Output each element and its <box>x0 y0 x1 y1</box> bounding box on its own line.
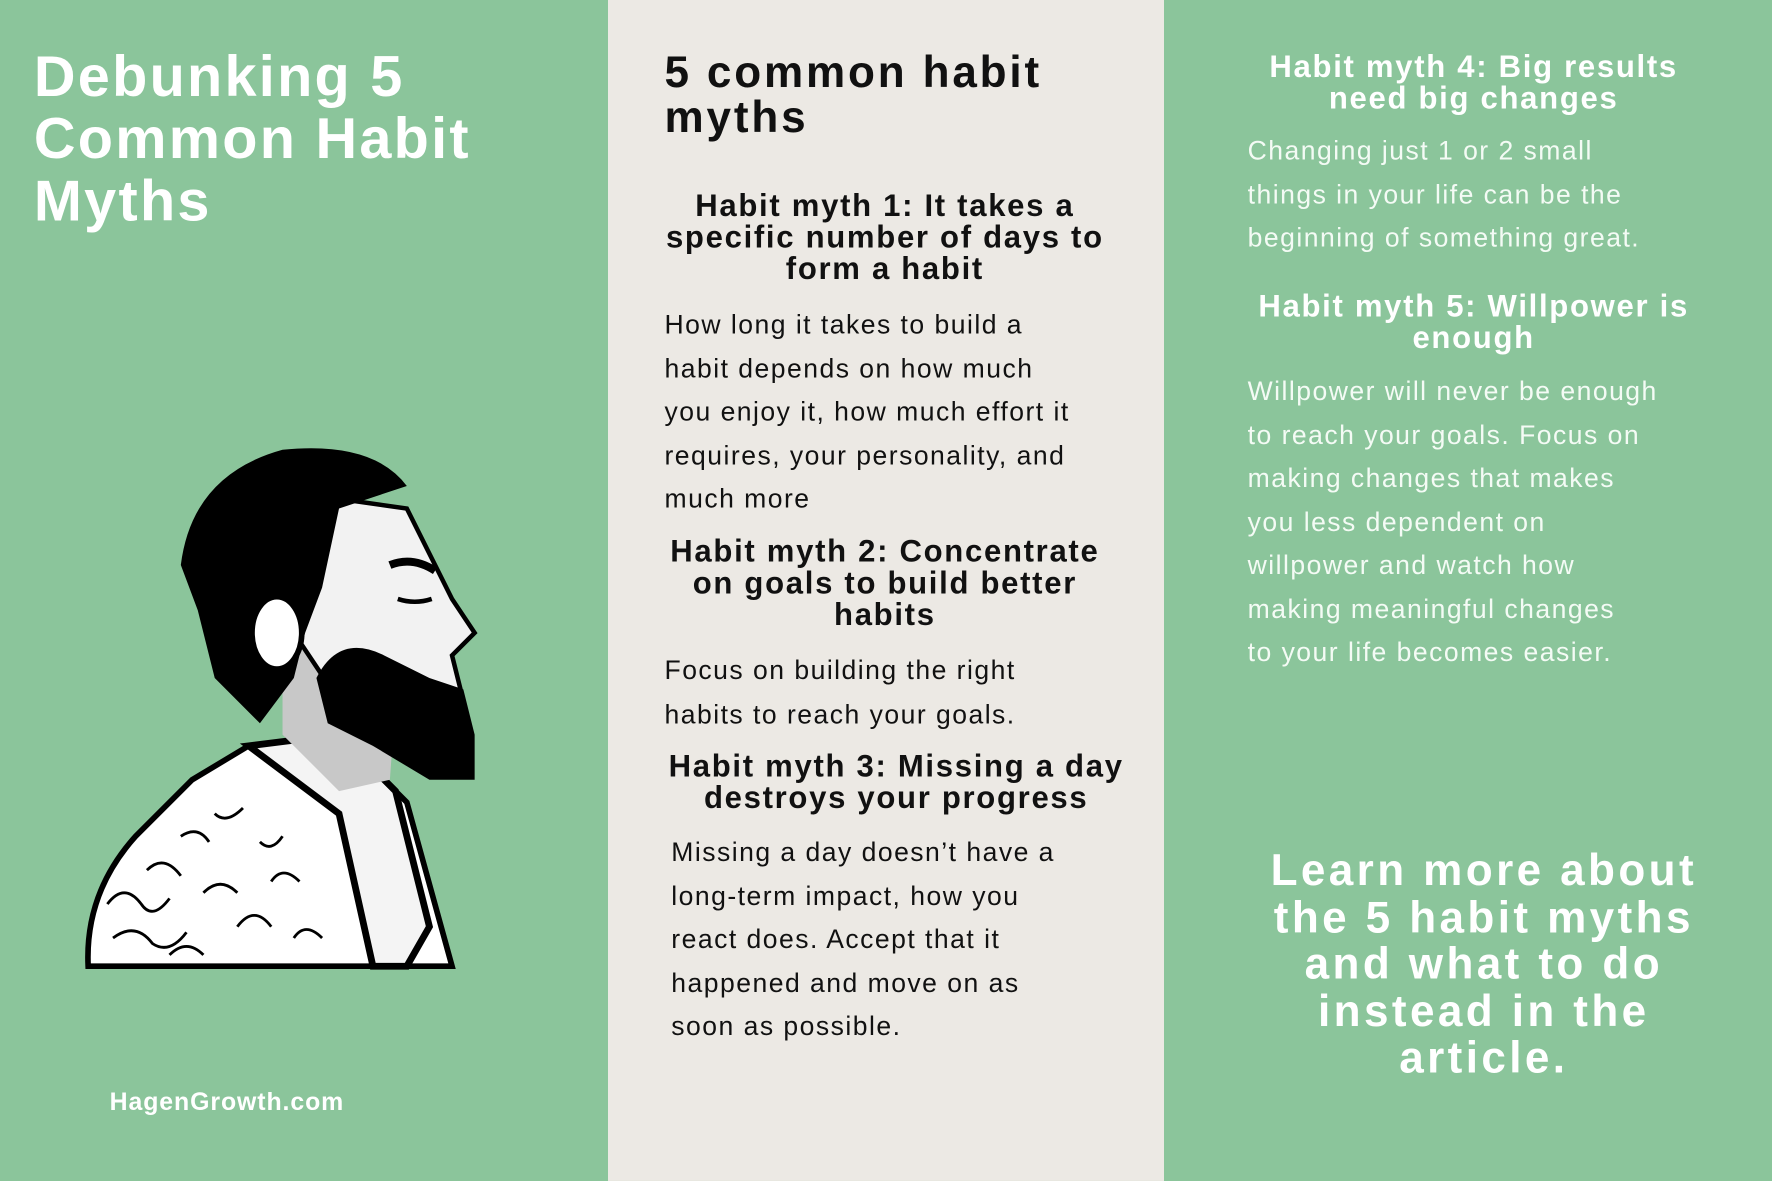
footer: website: HagenGrowth.com <box>110 1087 344 1115</box>
myth 1 heading: Habit myth 1: It takes a <box>695 188 1074 223</box>
title <box>34 44 471 233</box>
myth 3 text: happened and move on as <box>671 968 1020 997</box>
myth 5 heading: Habit myth 5: Willpower is <box>1258 288 1689 323</box>
title: Myths <box>34 168 212 233</box>
myth 5 heading: enough <box>1412 320 1535 355</box>
myth 2 heading <box>670 533 1099 632</box>
call to action: the 5 habit myths <box>1274 893 1694 942</box>
myth 3 text: react does. Accept that it <box>671 924 1000 954</box>
call to action: instead in the <box>1318 987 1650 1036</box>
myth 1 heading <box>666 188 1104 286</box>
myth 4 text: things in your life can be the <box>1248 179 1622 209</box>
myth 3 text: Missing a day doesn’t have a <box>671 837 1055 867</box>
myth 5 text: you less dependent on <box>1248 507 1546 536</box>
myth 3 text: soon as possible. <box>671 1011 901 1041</box>
myth 3 heading <box>669 748 1124 815</box>
panel: right green myths 4-5 <box>1164 0 1772 1181</box>
panel: left green <box>0 0 608 1181</box>
title: Debunking 5 <box>34 44 405 108</box>
myth 1 text: How long it takes to build a <box>664 310 1023 339</box>
myth 5 text: making meaningful changes <box>1248 594 1615 623</box>
myth 5 text: willpower and watch how <box>1248 550 1575 580</box>
myth 4 heading: Habit myth 4: Big results <box>1269 49 1678 84</box>
myth 3 heading: Habit myth 3: Missing a day <box>669 748 1124 783</box>
myth 3 text <box>671 837 1055 1041</box>
myth 3 text: long-term impact, how you <box>671 881 1019 910</box>
myth 4 heading: need big changes <box>1329 80 1618 115</box>
myth 1 text: habit depends on how much <box>664 353 1033 383</box>
myth 2 text <box>664 655 1016 729</box>
heading: 5 common habit myths: myths <box>664 94 808 142</box>
myth 1 text <box>664 310 1070 513</box>
myth 5 text: to reach your goals. Focus on <box>1248 420 1640 449</box>
myth 5 text: Willpower will never be enough <box>1248 376 1658 406</box>
myth 2 heading: on goals to build better <box>693 565 1077 600</box>
heading: 5 common habit myths: 5 common habit <box>664 49 1042 97</box>
myth 2 text: habits to reach your goals. <box>664 699 1016 728</box>
myth 2 heading: habits <box>834 597 936 632</box>
title: Common Habit <box>34 106 471 171</box>
call to action: and what to do <box>1305 940 1663 989</box>
heading: 5 common habit myths <box>664 49 1042 142</box>
myth 3 heading: destroys your progress <box>704 780 1088 815</box>
myth 1 heading: form a habit <box>786 251 984 286</box>
myth 5 text: making changes that makes <box>1248 463 1615 493</box>
call to action <box>1271 846 1697 1083</box>
myth 4 text: Changing just 1 or 2 small <box>1248 136 1593 165</box>
myth 2 text: Focus on building the right <box>664 655 1016 685</box>
myth 1 text: requires, your personality, and <box>664 440 1065 470</box>
myth 5 text: to your life becomes easier. <box>1248 637 1612 667</box>
myth 1 text: much more <box>664 484 811 513</box>
call to action: Learn more about <box>1271 846 1697 895</box>
illustration: bearded man profile <box>85 448 478 970</box>
myth 4 text: beginning of something great. <box>1248 223 1640 252</box>
myth 1 text: you enjoy it, how much effort it <box>664 397 1070 426</box>
panel: middle myths 1-3 <box>608 0 1164 1181</box>
myth 5 heading <box>1258 288 1689 355</box>
myth 4 text <box>1248 136 1640 252</box>
myth 5 text <box>1248 376 1658 667</box>
myth 2 heading: Habit myth 2: Concentrate <box>670 533 1099 568</box>
call to action: article. <box>1399 1034 1568 1083</box>
myth 1 heading: specific number of days to <box>666 219 1104 254</box>
myth 4 heading <box>1269 49 1678 115</box>
